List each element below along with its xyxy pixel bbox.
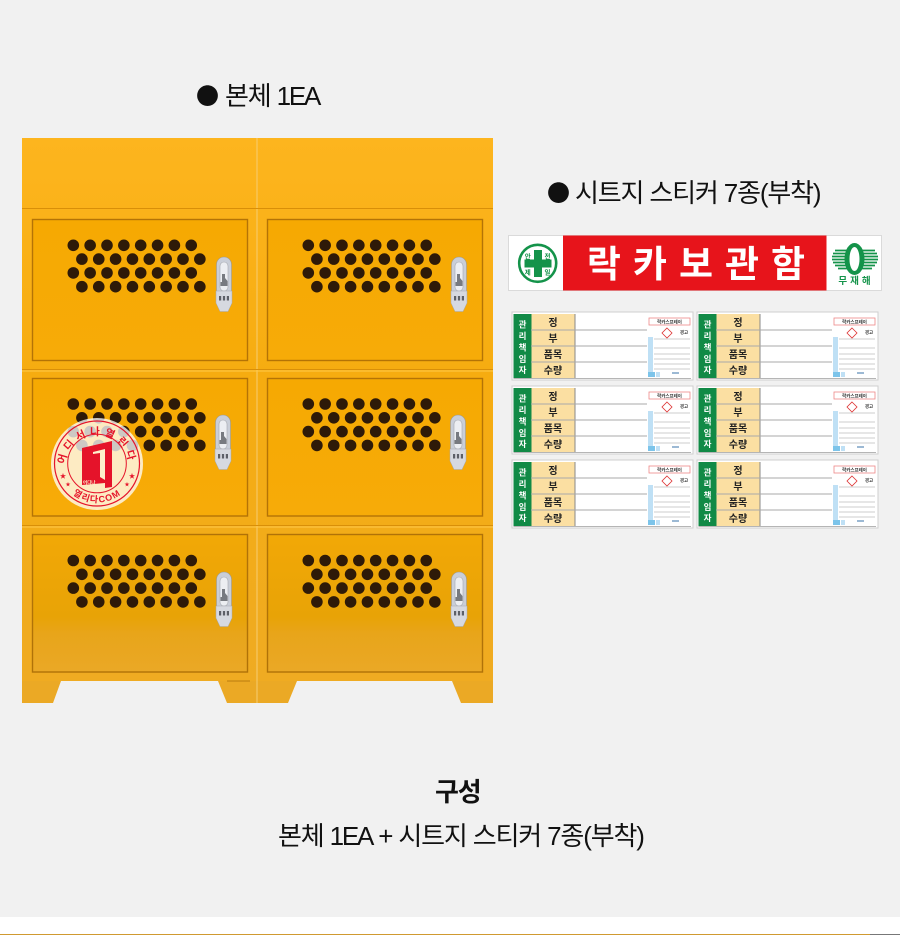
sticker 3: 책 [519, 416, 527, 426]
sticker 4: 관 [704, 394, 712, 404]
stamp: watermark seal [51, 418, 143, 510]
stamp: watermark seal: 어디서나열린다 [57, 426, 136, 463]
stamp: watermark seal: 어디나 [83, 479, 96, 486]
sticker 1: 수량 [544, 364, 562, 377]
icon: safety first cross: 일 [545, 268, 551, 276]
sticker 2: 리 [704, 331, 711, 341]
sticker 1: 락카스프레이 [657, 319, 682, 326]
stamp: watermark seal: ★ [65, 482, 71, 488]
banner red panel [563, 236, 826, 290]
sticker 2: 정 [733, 317, 743, 329]
cabinet body [22, 138, 493, 681]
sticker 3: 리 [519, 405, 526, 415]
sticker 3: 정 [548, 391, 558, 403]
sticker 2: 자 [704, 365, 712, 375]
cabinet [22, 138, 493, 703]
sticker 1: 관 [519, 320, 527, 330]
icon: safety first cross: 제 [525, 268, 531, 276]
text: composition detail: 본체 1EA + 시트지 스티커 7종(부착) [278, 821, 644, 851]
icon: safety first cross: 안 [525, 252, 531, 260]
sticker 5: 관 [519, 468, 527, 478]
door: middle left [32, 378, 248, 516]
sticker 3: 수량 [544, 438, 562, 451]
heading: composition: 구성 [435, 777, 481, 807]
sticker 1: 품목 [544, 349, 562, 361]
sticker 4: 정 [733, 391, 743, 403]
banner title: 락카보관함 [587, 244, 817, 285]
sticker 3: 임 [519, 428, 526, 438]
sticker 4: 책 [704, 416, 712, 426]
sticker 5: 락카스프레이 [657, 467, 682, 474]
door: bottom left [32, 534, 248, 672]
sticker 4: 자 [704, 439, 712, 449]
sticker 5: 정 [548, 465, 558, 477]
sticker 2 [697, 312, 878, 380]
sticker 6: 리 [704, 479, 711, 489]
sticker 4: 락카스프레이 [842, 393, 867, 400]
door: top right [268, 220, 482, 360]
sticker 5: 책 [519, 490, 527, 500]
sticker 2: 책 [704, 342, 712, 352]
sticker 2: 임 [704, 354, 711, 364]
sticker 6: 경고 [865, 477, 873, 483]
sticker 2: 관 [704, 320, 712, 330]
sticker 5: 리 [519, 479, 526, 489]
sticker 3 [512, 386, 693, 454]
sticker 3: 품목 [544, 423, 562, 435]
door: top left [32, 220, 248, 360]
sticker 4: 부 [733, 407, 743, 419]
sticker 4: 경고 [865, 403, 873, 409]
sticker 5: 자 [519, 513, 527, 523]
sticker 1 [512, 312, 693, 380]
sticker 4: 수량 [729, 438, 747, 451]
door: bottom right [268, 534, 482, 672]
sticker 5: 임 [519, 502, 526, 512]
sticker 1: 리 [519, 331, 526, 341]
sticker 5: 부 [548, 481, 558, 493]
sticker 6 [697, 460, 878, 528]
sticker 6: 품목 [729, 497, 747, 509]
icon: safety first cross: 전 [545, 252, 551, 260]
sticker 5 [512, 460, 693, 528]
sticker 3: 자 [519, 439, 527, 449]
sticker 2: 품목 [729, 349, 747, 361]
sticker 1: 책 [519, 342, 527, 352]
sticker 5: 경고 [680, 477, 688, 483]
sticker 3: 락카스프레이 [657, 393, 682, 400]
sticker 3: 관 [519, 394, 527, 404]
sticker 2: 부 [733, 333, 743, 345]
sticker 3: 경고 [680, 403, 688, 409]
footer band [0, 917, 900, 935]
sticker 6: 임 [704, 502, 711, 512]
heading: sticker set: ●시트지 스티커 7종(부착) [547, 174, 820, 208]
sticker 5: 수량 [544, 512, 562, 525]
banner: locker storage sign [508, 236, 882, 290]
stamp: watermark seal: ★ [124, 482, 130, 488]
sticker 2: 경고 [865, 329, 873, 335]
sticker 1: 정 [548, 317, 558, 329]
sticker 1: 자 [519, 365, 527, 375]
stamp: watermark seal: ★ [60, 473, 67, 480]
heading: main body: ●본체 1EA [196, 77, 319, 111]
sticker 4 [697, 386, 878, 454]
icon: zero accident [832, 243, 878, 287]
door: middle right [268, 378, 482, 516]
sticker 5: 품목 [544, 497, 562, 509]
icon: safety first cross [519, 245, 556, 282]
stamp: watermark seal: ★ [129, 473, 136, 480]
sticker 2: 락카스프레이 [842, 319, 867, 326]
sticker 4: 품목 [729, 423, 747, 435]
sticker 6: 관 [704, 468, 712, 478]
sticker 1: 임 [519, 354, 526, 364]
cabinet feet [22, 681, 493, 703]
sticker 1: 부 [548, 333, 558, 345]
sticker 6: 부 [733, 481, 743, 493]
sticker 4: 임 [704, 428, 711, 438]
sticker 6: 자 [704, 513, 712, 523]
sticker 1: 경고 [680, 329, 688, 335]
sticker 4: 리 [704, 405, 711, 415]
icon: zero accident: 무재해 [838, 275, 874, 287]
sticker 6: 수량 [729, 512, 747, 525]
sticker 6: 락카스프레이 [842, 467, 867, 474]
stamp: watermark seal: 열리다COM [74, 489, 120, 504]
sticker 6: 책 [704, 490, 712, 500]
sticker 3: 부 [548, 407, 558, 419]
sticker 6: 정 [733, 465, 743, 477]
sticker 2: 수량 [729, 364, 747, 377]
